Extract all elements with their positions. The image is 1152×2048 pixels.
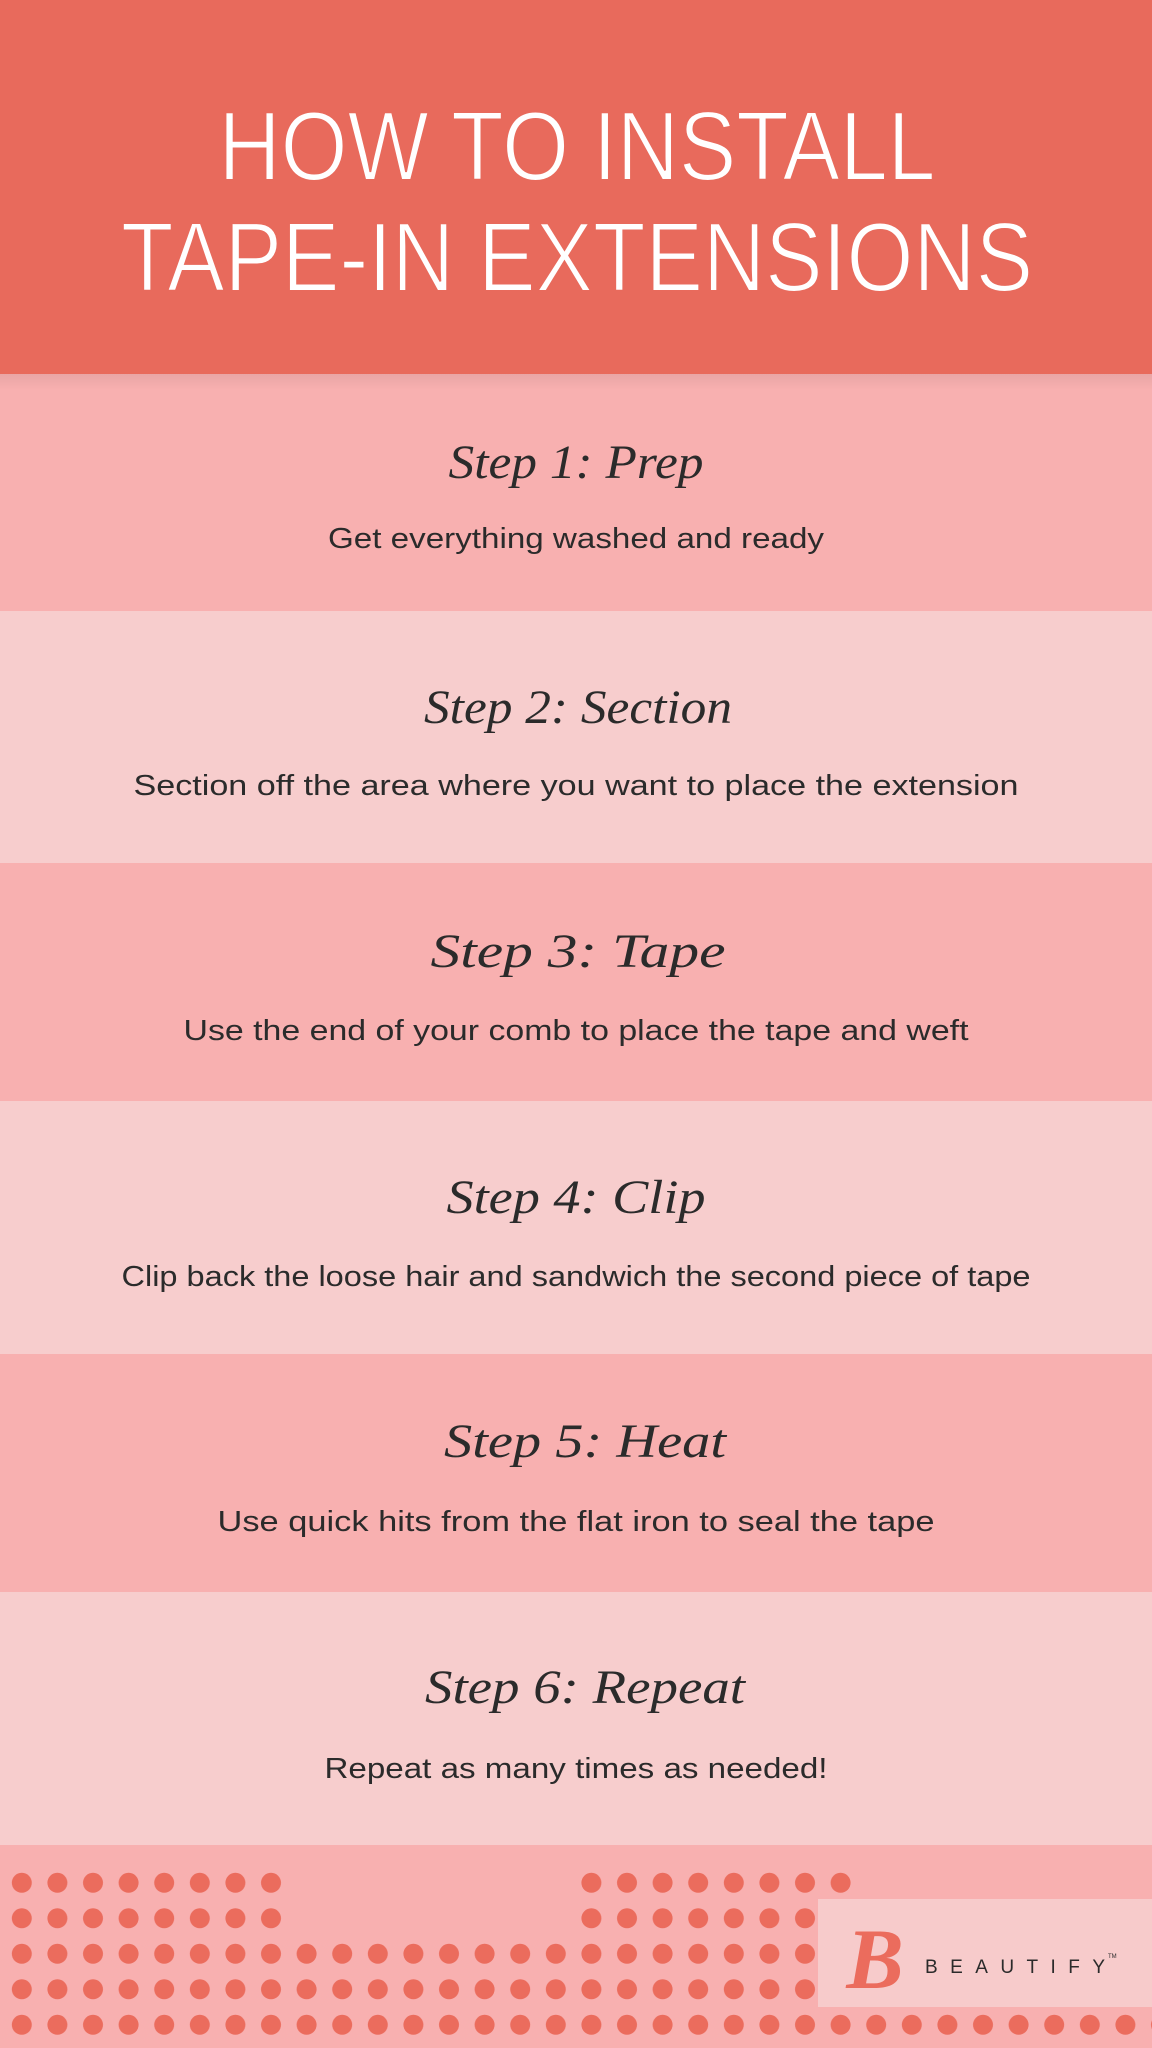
step 2: Step 2: Section — [424, 681, 732, 734]
step 3 — [184, 925, 969, 1047]
step 5: Use quick hits from the flat iron to seal the tape — [218, 1506, 934, 1538]
brand name: BEAUTIFY — [925, 1957, 1105, 1978]
step 4: Step 4: Clip — [446, 1171, 706, 1224]
step 6: Repeat as many times as needed! — [324, 1753, 828, 1785]
step 6: Step 6: Repeat — [425, 1661, 747, 1714]
step 2 — [134, 681, 1018, 802]
step 3: Use the end of your comb to place the tape and weft — [184, 1015, 969, 1047]
step 4 — [122, 1171, 1030, 1293]
title — [121, 91, 1033, 312]
step 1: Get everything washed and ready — [328, 523, 825, 555]
step 5 — [218, 1415, 934, 1538]
header — [0, 0, 1152, 374]
step 1: Step 1: Prep — [448, 436, 704, 489]
step 4: Clip back the loose hair and sandwich the second piece of tape — [122, 1261, 1030, 1293]
step 3: Step 3: Tape — [430, 925, 726, 978]
logo box — [818, 1899, 1152, 2007]
step 5: Step 5: Heat — [444, 1415, 728, 1468]
step 6 — [324, 1661, 828, 1785]
dot pattern — [4, 1865, 1152, 2043]
step 1 — [328, 436, 825, 555]
logo box: TM — [1108, 1954, 1117, 1960]
title: TAPE-IN EXTENSIONS — [121, 202, 1033, 312]
title: HOW TO INSTALL — [218, 91, 936, 201]
step 2: Section off the area where you want to place the extension — [134, 770, 1018, 802]
icon: B monogram: B — [845, 1911, 904, 2007]
